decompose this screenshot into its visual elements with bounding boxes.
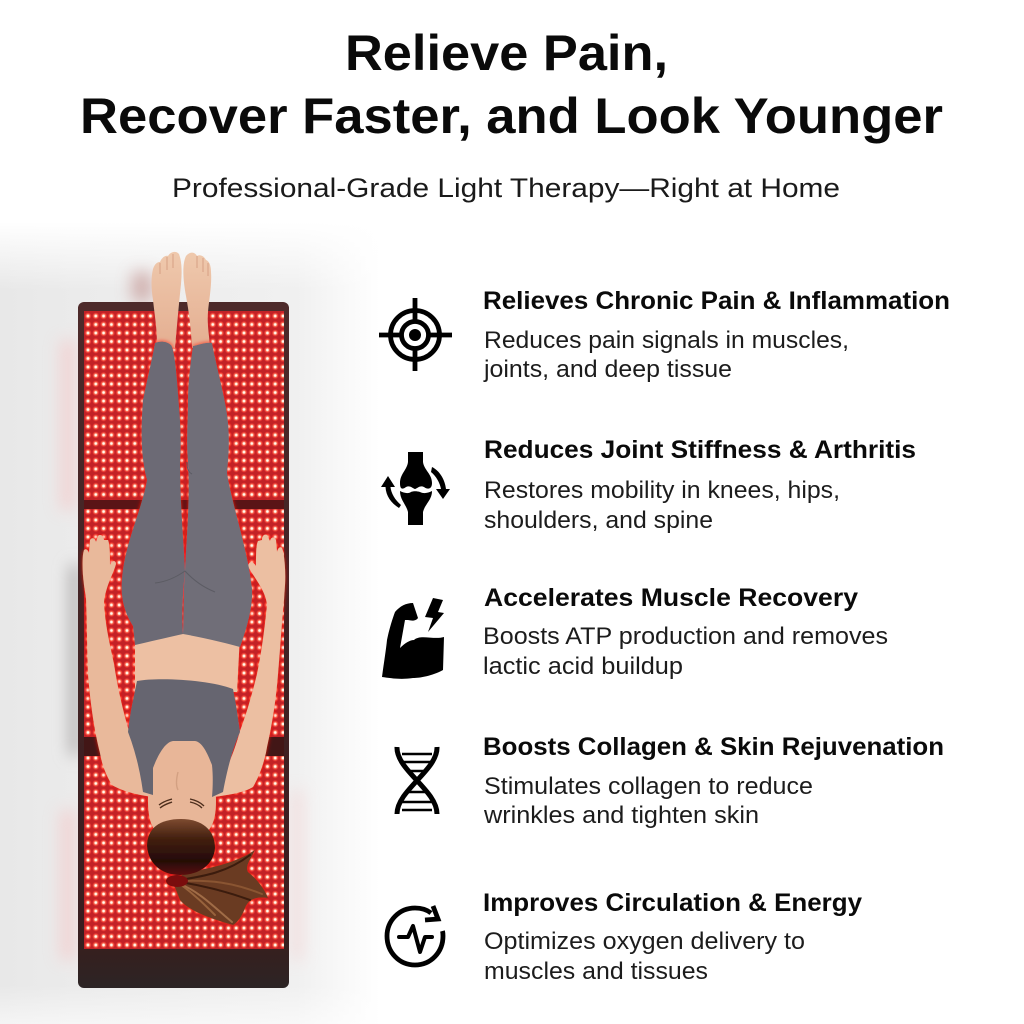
feature 3: muscle recovery: lactic acid buildup (483, 653, 683, 680)
icon: DNA helix (397, 747, 437, 814)
chest and face (148, 738, 216, 840)
right arm and hand (213, 535, 285, 797)
icon: flexed arm with bolt (382, 598, 444, 679)
feature 3: muscle recovery: Boosts ATP production and removes (483, 623, 888, 650)
mat (78, 302, 289, 988)
feature 5: circulation (387, 889, 862, 985)
photo: woman on red light therapy mat (78, 252, 289, 988)
leggings (122, 342, 252, 647)
face details (159, 772, 204, 808)
title (80, 25, 943, 144)
feature 1: chronic pain: Relieves Chronic Pain & Inflammation (483, 287, 950, 315)
feature 2: joint stiffness (381, 436, 916, 534)
icon: joint (381, 452, 450, 525)
feature 3: muscle recovery (382, 584, 888, 680)
title: Relieve Pain, (345, 25, 668, 81)
title: Recover Faster, and Look Younger (80, 88, 943, 144)
feature 2: joint stiffness: Restores mobility in knees, hips, (484, 477, 840, 504)
feature 5: circulation: muscles and tissues (484, 958, 708, 985)
feature 1: chronic pain: joints, and deep tissue (483, 356, 732, 383)
subtitle: Professional-Grade Light Therapy—Right at Home (172, 173, 840, 203)
icon: circular arrow with pulse (387, 906, 443, 965)
feature 1: chronic pain (379, 287, 950, 383)
feature 1: chronic pain: Reduces pain signals in muscles, (484, 327, 849, 354)
feature 5: circulation: Optimizes oxygen delivery to (484, 928, 805, 955)
woman (82, 342, 285, 925)
hair (147, 819, 268, 925)
soft grey backdrop behind mat (0, 222, 380, 1024)
feature 4: collagen: wrinkles and tighten skin (483, 802, 759, 829)
feature 4: collagen (397, 733, 944, 829)
feature 2: joint stiffness: Reduces Joint Stiffness & Arthritis (484, 436, 916, 464)
ponytail (172, 850, 268, 925)
right foot (183, 253, 211, 348)
feature 2: joint stiffness: shoulders, and spine (484, 507, 713, 534)
left foot (152, 252, 182, 348)
feature 4: collagen: Boosts Collagen & Skin Rejuvenation (483, 733, 944, 761)
feature 4: collagen: Stimulates collagen to reduce (484, 773, 813, 800)
left arm and hand (82, 535, 153, 797)
midriff (135, 634, 240, 692)
feature 3: muscle recovery: Accelerates Muscle Recovery (484, 584, 858, 612)
feature 5: circulation: Improves Circulation & Energy (483, 889, 862, 917)
sports top (128, 679, 240, 797)
icon: target (379, 298, 452, 371)
